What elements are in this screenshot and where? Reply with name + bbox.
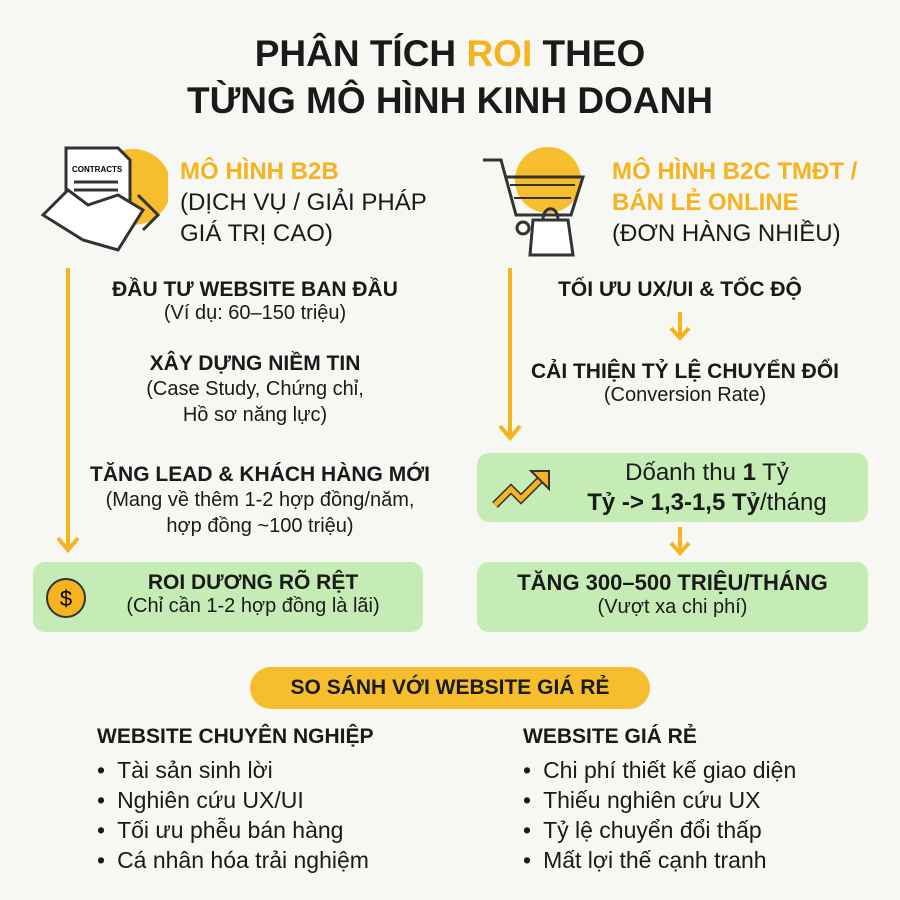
- text: right step 2: CẢI THIỆN TỶ LỆ CHUYỂN ĐỔI: [531, 360, 839, 383]
- text: left step 2: [146, 350, 364, 426]
- heading: B2B: [180, 157, 427, 247]
- list: cheap: WEBSITE GIÁ RẺ: [523, 725, 697, 748]
- list: cheap: Chi phí thiết kế giao diện: [543, 757, 796, 783]
- panel: revenue: Dốanh thu 1 Tỷ: [625, 459, 789, 486]
- title: [187, 32, 713, 121]
- list: cheap: Thiếu nghiên cứu UX: [543, 787, 760, 813]
- list: cheap: Mất lợi thế cạnh tranh: [543, 847, 767, 873]
- heading: B2C: (ĐƠN HÀNG NHIỀU): [612, 220, 841, 247]
- title: TỪNG MÔ HÌNH KINH DOANH: [187, 80, 713, 121]
- list: professional: [97, 724, 374, 873]
- list: professional: Cá nhân hóa trải nghiệm: [117, 847, 369, 873]
- icon: trend arrow: [492, 470, 550, 508]
- icon: cart: [483, 147, 585, 256]
- icon: handshake contract: CONTRACTS: [72, 165, 123, 174]
- text: left step 2: XÂY DỰNG NIỀM TIN: [150, 352, 360, 375]
- arrow: left flow: [56, 268, 80, 553]
- icon: dollar: [46, 578, 86, 618]
- text: left step 3: TĂNG LEAD & KHÁCH HÀNG MỚI: [90, 463, 430, 486]
- panel: increase: [477, 562, 868, 632]
- text: left step 2: (Case Study, Chứng chỉ,: [146, 378, 364, 400]
- icon: dollar: $: [60, 586, 72, 611]
- list: professional: Tối ưu phễu bán hàng: [117, 817, 343, 843]
- text: right step 1: TỐI ƯU UX/UI & TỐC ĐỘ: [558, 278, 802, 301]
- panel: increase: TĂNG 300–500 TRIỆU/THÁNG: [517, 570, 828, 595]
- heading: B2B: (DỊCH VỤ / GIẢI PHÁP: [180, 189, 427, 216]
- heading: B2B: GIÁ TRỊ CAO): [180, 220, 333, 247]
- list: cheap: Tỷ lệ chuyển đổi thấp: [543, 817, 762, 843]
- text: left step 3: (Mang về thêm 1-2 hợp đồng/năm,: [106, 489, 414, 511]
- text: left step 1: ĐẦU TƯ WEBSITE BAN ĐẦU: [112, 278, 398, 301]
- list: professional: WEBSITE CHUYÊN NGHIỆP: [97, 725, 374, 748]
- panel: revenue: [477, 453, 868, 522]
- text: left step 1: [112, 277, 398, 324]
- text: right step 2: (Conversion Rate): [604, 384, 766, 406]
- arrow: right small 2: [670, 527, 690, 556]
- heading: B2C: [612, 157, 858, 247]
- title: PHÂN TÍCH ROI THEO: [255, 33, 645, 74]
- panel: increase: (Vượt xa chi phí): [598, 596, 747, 618]
- heading: B2C: BÁN LẺ ONLINE: [612, 189, 799, 216]
- heading: B2C: MÔ HÌNH B2C TMĐT /: [612, 158, 857, 185]
- arrow: right flow: [498, 268, 522, 441]
- panel: revenue: Tỷ -> 1,3-1,5 Tỷ/tháng: [587, 489, 827, 516]
- text: left step 3: hợp đồng ~100 triệu): [166, 515, 354, 537]
- arrow: right small 1: [670, 312, 690, 341]
- list: professional: Nghiên cứu UX/UI: [117, 787, 304, 813]
- panel: ROI left: [33, 562, 423, 632]
- text: left step 3: [90, 462, 430, 537]
- badge: comparison title: SO SÁNH VỚI WEBSITE GIÁ RẺ: [291, 676, 609, 699]
- panel: ROI left: ROI DƯƠNG RÕ RỆT: [148, 571, 358, 594]
- list: professional: Tài sản sinh lời: [117, 757, 273, 783]
- icon: handshake contract: [40, 146, 168, 252]
- text: right step 2: [531, 358, 839, 406]
- text: left step 1: (Ví dụ: 60–150 triệu): [164, 302, 346, 324]
- panel: ROI left: (Chỉ cần 1-2 hợp đồng là lãi): [126, 595, 380, 617]
- heading: B2B: MÔ HÌNH B2B: [180, 158, 339, 185]
- text: left step 2: Hồ sơ năng lực): [183, 404, 327, 426]
- list: cheap: [523, 724, 796, 873]
- badge: comparison title: [250, 667, 650, 709]
